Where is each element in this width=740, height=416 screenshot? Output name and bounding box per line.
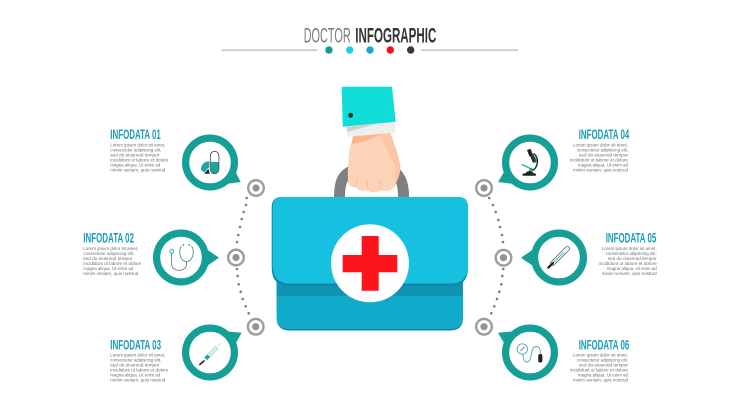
sleeve bbox=[342, 87, 396, 127]
heading 04: INFODATA 04 bbox=[579, 126, 629, 142]
body text 05: sed do eiusmod tempor bbox=[608, 256, 657, 261]
cuff shadow bbox=[347, 124, 378, 132]
dotted connector: right bbox=[488, 197, 505, 315]
icon: pills bbox=[201, 151, 219, 174]
icon: syringe bbox=[199, 343, 221, 365]
body text 02: sed do eiusmod tempor bbox=[83, 256, 133, 261]
body text 01: magna aliqua. Ut enim ad bbox=[110, 162, 161, 168]
badge 04 bbox=[498, 138, 554, 187]
badge 02 bbox=[157, 233, 219, 282]
body text 04: magna aliqua. Ut enim ad bbox=[578, 162, 628, 168]
body text 04: minim veniam, quis nostrud bbox=[573, 168, 628, 172]
body text 01 bbox=[110, 142, 169, 172]
case body bbox=[277, 270, 463, 330]
heading 06: INFODATA 06 bbox=[579, 336, 629, 352]
hand holding medical case bbox=[340, 87, 404, 197]
icon: blood pressure gauge bbox=[517, 344, 542, 362]
body text 01: consectetur adipiscing elit, bbox=[110, 148, 161, 152]
title divider with coloured dots bbox=[222, 46, 518, 54]
icon: microscope bbox=[522, 149, 537, 176]
icon: stethoscope bbox=[170, 244, 193, 270]
body text 02: consectetur adipiscing elit, bbox=[83, 251, 134, 256]
title: DOCTOR bbox=[304, 25, 351, 48]
title bbox=[304, 25, 436, 48]
heading 03: INFODATA 03 bbox=[110, 336, 161, 352]
badge 06 bbox=[498, 328, 554, 377]
case handle bbox=[340, 171, 404, 197]
white emblem circle bbox=[331, 224, 409, 302]
body text 05: minim veniam, quis nostrud bbox=[602, 271, 657, 276]
body text 02 bbox=[83, 246, 142, 276]
panel: infodata 05 bbox=[521, 230, 657, 282]
body text 03: sed do eiusmod tempor bbox=[110, 362, 160, 368]
body text 01: sed do eiusmod tempor bbox=[110, 152, 160, 158]
panel: infodata 04 bbox=[498, 126, 629, 187]
badge 05 bbox=[521, 233, 583, 282]
flap shadow band bbox=[277, 280, 463, 296]
body text 02: magna aliqua. Ut enim ad bbox=[83, 266, 134, 271]
body text 03: incididunt ut labore et dolore bbox=[110, 368, 169, 372]
panel: infodata 06 bbox=[498, 328, 629, 382]
case body face bbox=[277, 270, 463, 329]
medical case bbox=[272, 197, 468, 330]
body text 02: Lorem ipsum dolor sit amet, bbox=[83, 246, 138, 251]
body text 06: consectetur adipiscing elit, bbox=[577, 358, 628, 362]
body text 06: sed do eiusmod tempor bbox=[579, 362, 628, 368]
body text 05: incididunt ut labore et dolore bbox=[599, 261, 657, 266]
body text 05 bbox=[599, 246, 657, 276]
flap face bbox=[273, 197, 468, 284]
body text 04: sed do eiusmod tempor bbox=[579, 152, 628, 158]
body text 03: Lorem ipsum dolor sit amet, bbox=[110, 352, 165, 358]
body text 03 bbox=[110, 352, 169, 382]
icon: red cross bbox=[343, 236, 397, 291]
case flap bbox=[272, 197, 468, 286]
badge 03 bbox=[186, 328, 242, 377]
hand bbox=[348, 131, 400, 192]
body text 01: incididunt ut labore et dolore bbox=[110, 158, 169, 162]
shirt cuff bbox=[347, 122, 396, 137]
body text 06: magna aliqua. Ut enim ad bbox=[578, 372, 628, 378]
body text 05: consectetur adipiscing elit, bbox=[606, 251, 657, 256]
heading 01: INFODATA 01 bbox=[110, 126, 161, 142]
body text 06: minim veniam, quis nostrud bbox=[573, 378, 628, 382]
body text 06 bbox=[570, 352, 628, 382]
body text 02: incididunt ut labore et dolore bbox=[83, 261, 142, 266]
body text 06: incididunt ut labore et dolore bbox=[570, 368, 628, 372]
badge 01 bbox=[186, 138, 241, 187]
body text 02: minim veniam, quis nostrud bbox=[83, 271, 139, 276]
panel: infodata 01 bbox=[110, 126, 241, 187]
body text 05: magna aliqua. Ut enim ad bbox=[607, 266, 657, 271]
body text 03: consectetur adipiscing elit, bbox=[110, 358, 161, 362]
body text 04: incididunt ut labore et dolore bbox=[570, 158, 628, 162]
panel: infodata 02 bbox=[83, 230, 219, 282]
body text 04: consectetur adipiscing elit, bbox=[577, 148, 628, 152]
icon: thermometer bbox=[548, 249, 567, 268]
heading 05: INFODATA 05 bbox=[606, 230, 656, 246]
heading 02: INFODATA 02 bbox=[83, 230, 134, 246]
connector nodes bbox=[228, 180, 511, 335]
body text 06: Lorem ipsum dolor sit amet, bbox=[573, 352, 628, 358]
body text 05: Lorem ipsum dolor sit amet, bbox=[602, 246, 657, 251]
dotted connector: left bbox=[236, 197, 250, 315]
panel: infodata 03 bbox=[110, 328, 242, 382]
body text 03: minim veniam, quis nostrud bbox=[110, 378, 166, 382]
body text 03: magna aliqua. Ut enim ad bbox=[110, 372, 161, 378]
body text 04: Lorem ipsum dolor sit amet, bbox=[573, 142, 628, 148]
body text 01: minim veniam, quis nostrud bbox=[110, 168, 166, 172]
body text 04 bbox=[570, 142, 628, 172]
title: INFOGRAPHIC bbox=[355, 25, 436, 48]
body text 01: Lorem ipsum dolor sit amet, bbox=[110, 142, 165, 148]
sleeve button bbox=[348, 113, 353, 118]
